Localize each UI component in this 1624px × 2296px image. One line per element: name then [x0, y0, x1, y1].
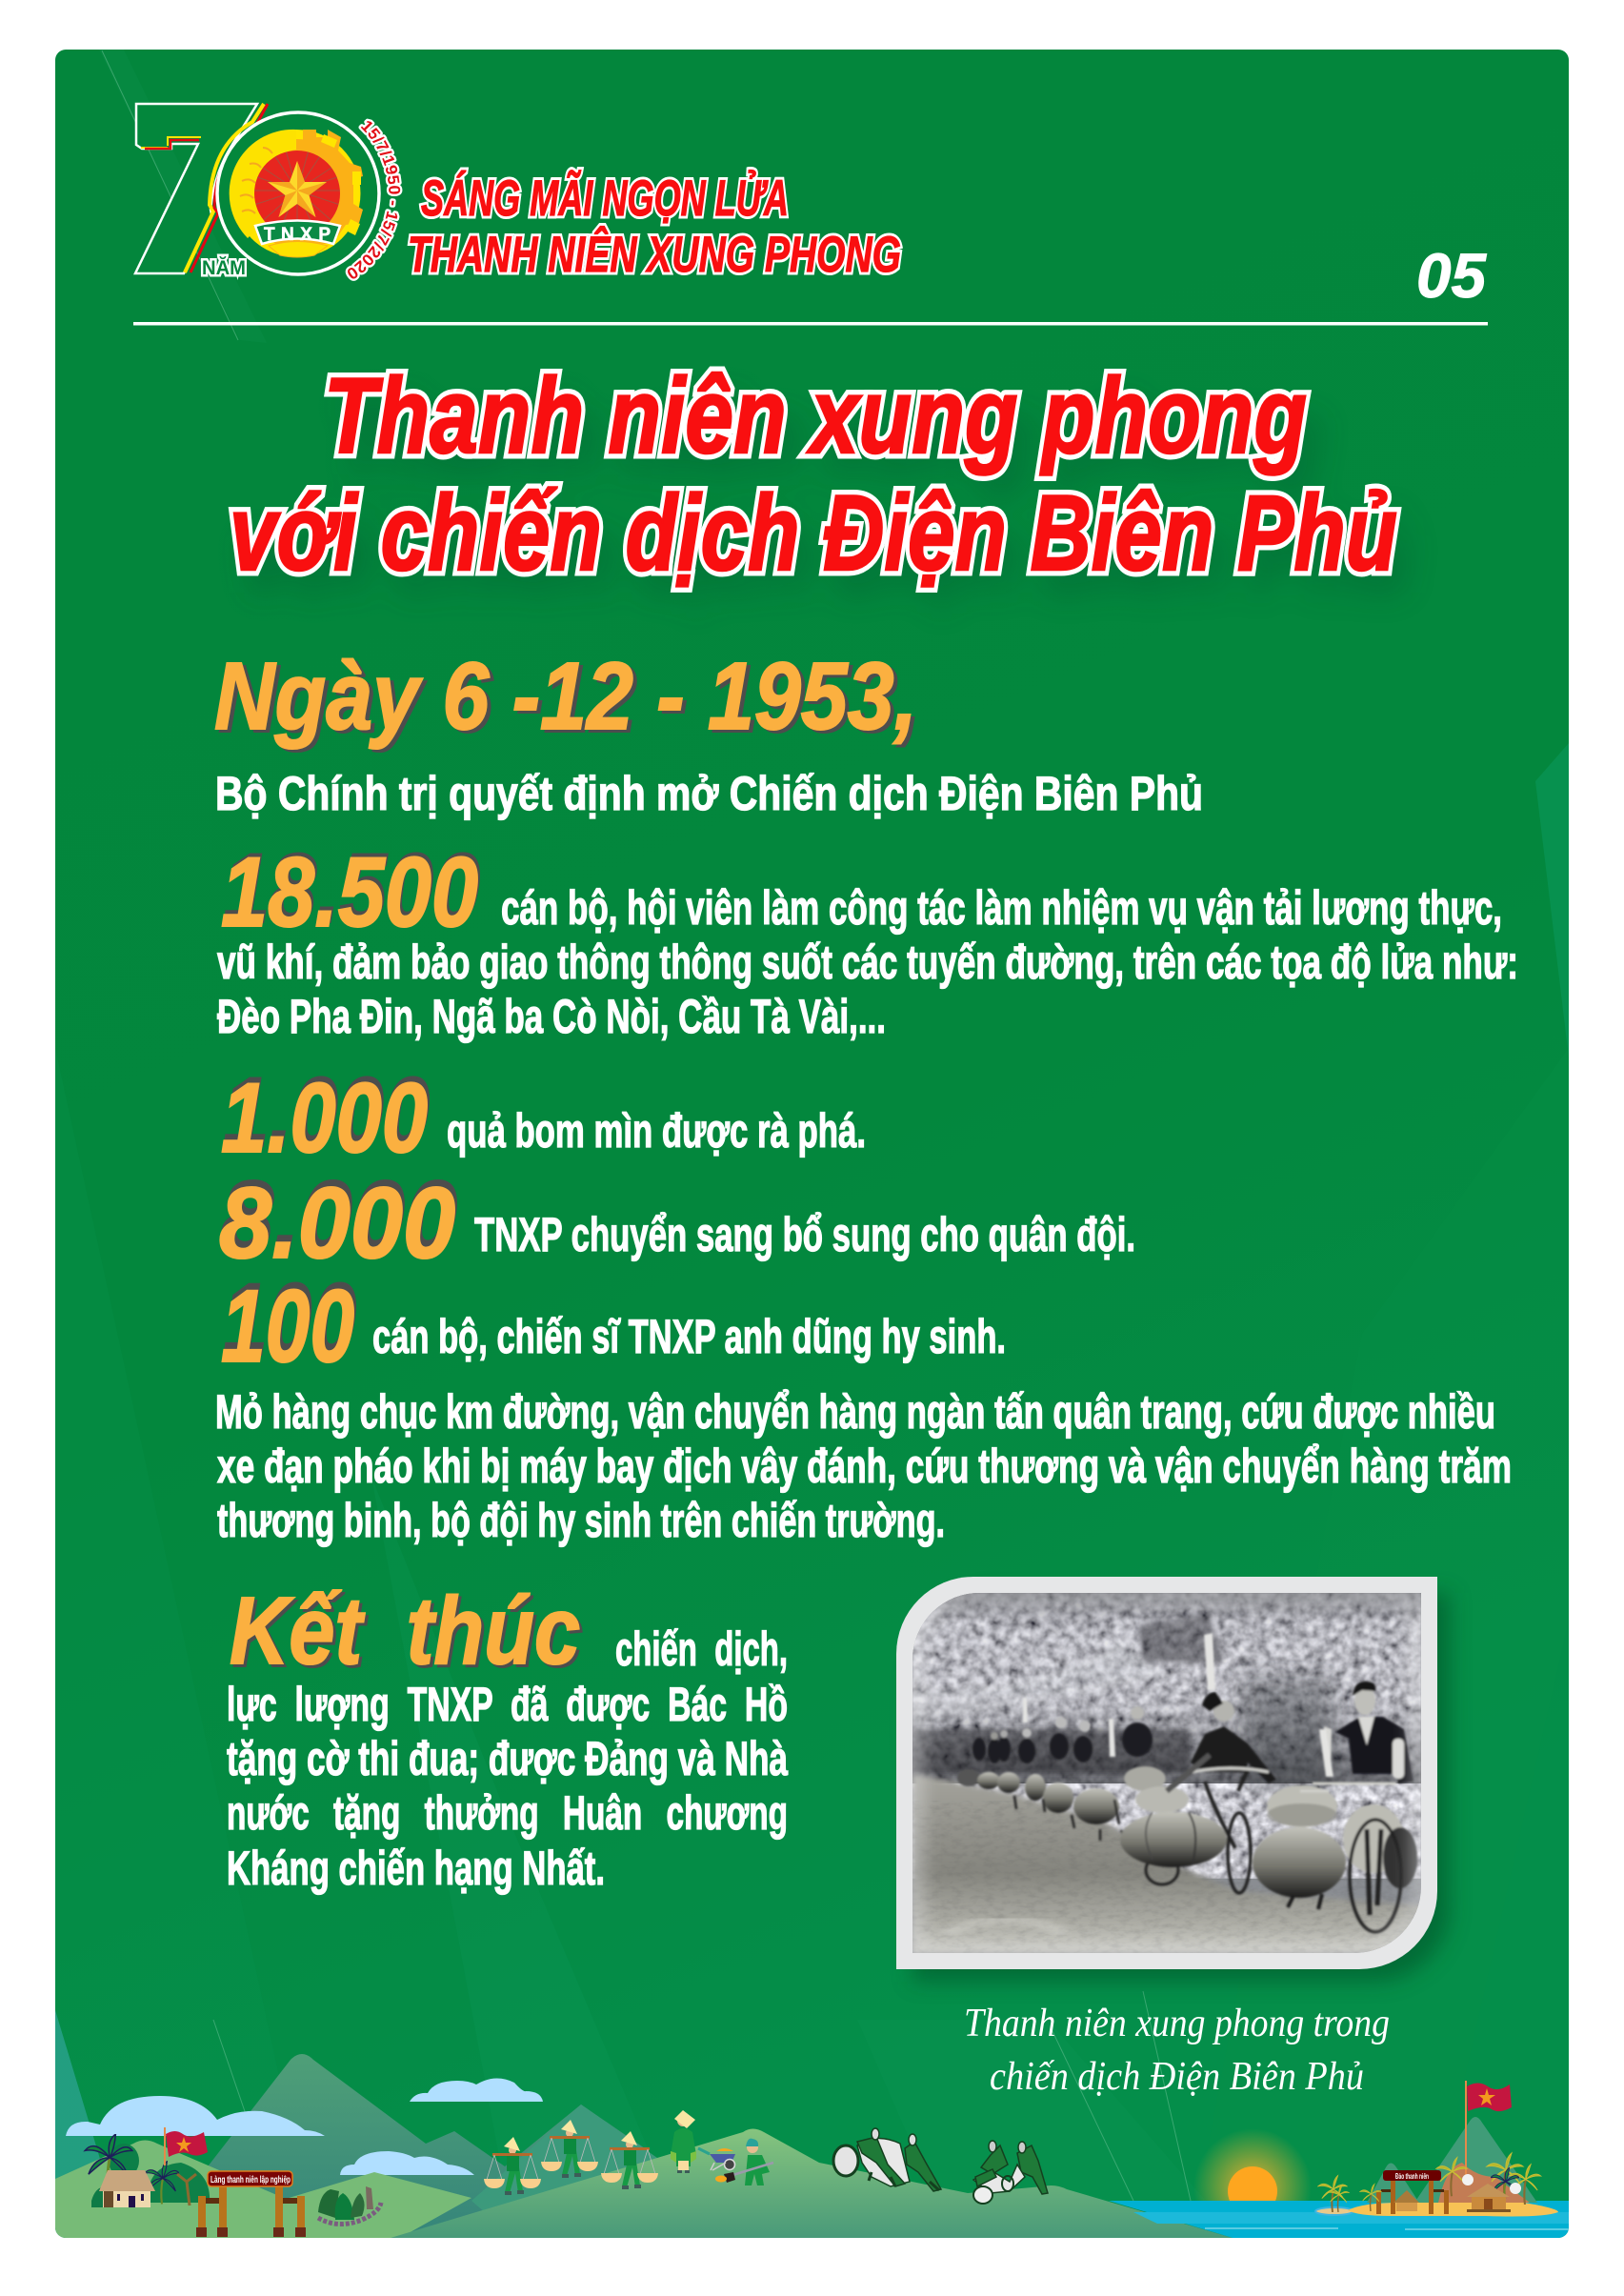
- woman in conical hat: [671, 2110, 696, 2173]
- man with bicycle, right: [1335, 1717, 1413, 1783]
- logo label NĂM: NĂM: [202, 257, 246, 279]
- statistic: 1.000: 1.000: [223, 1057, 430, 1168]
- statistic: 18.500: [217, 834, 1518, 1043]
- island gate: [1376, 2170, 1449, 2214]
- date heading: Ngày 6 -12 - 1953,: [214, 643, 917, 750]
- conclusion text block: nước tặng thưởng Huân chương: [227, 1786, 788, 1840]
- statistic: 8.000: 8.000: [219, 1167, 455, 1279]
- statistic: 8.000: [219, 1160, 1135, 1279]
- flag right: [1465, 2081, 1512, 2176]
- header slogan: THANH NIÊN XUNG PHONG: [408, 225, 901, 283]
- sea: [1109, 2201, 1569, 2238]
- soldiers group: [318, 2186, 381, 2225]
- statistic: 100: [221, 1261, 1006, 1383]
- decision text: Bộ Chính trị quyết định mở Chiến dịch Điện Biên Phủ: [215, 767, 1203, 820]
- conclusion text block: lực lượng TNXP đã được Bác Hồ: [227, 1678, 788, 1731]
- logo numeral seven: [135, 104, 268, 273]
- flag left: [164, 2127, 208, 2165]
- statistic: 100: 100: [221, 1268, 354, 1383]
- statistic: 8.000: TNXP chuyển sang bổ sung cho quân đội.: [474, 1208, 1135, 1261]
- photo frame: [896, 1577, 1451, 1982]
- workers carrying baskets: [484, 2120, 658, 2195]
- header logo: 70 years emblem: [133, 103, 402, 281]
- bicycle wheels: [1146, 1856, 1178, 1884]
- statistic: 18.500: 18.500: [221, 837, 478, 948]
- logo emblem badge: [230, 130, 363, 257]
- conclusion text block: Kết thúc: [232, 1581, 583, 1687]
- paragraph: road and transport work: [215, 1385, 1512, 1547]
- title: Thanh niên xung phong: [338, 378, 1321, 497]
- date heading: Ngày 6 -12 - 1953,: [218, 646, 921, 753]
- statistic: 8.000: 8.000: [221, 1160, 457, 1273]
- village: palm trees and stilt house: [85, 2134, 210, 2207]
- road: [912, 1774, 1421, 1953]
- page number: 05: [1416, 240, 1487, 311]
- conclusion text block: Kháng chiến hạng Nhất.: [227, 1842, 605, 1895]
- statistic: 100: cán bộ, chiến sĩ TNXP anh dũng hy sinh.: [372, 1310, 1006, 1363]
- motorbikes team 1: [833, 2128, 941, 2191]
- gate: village sign: Làng thanh niên lập nghiệp: [211, 2175, 291, 2185]
- ribbon TNXP: [255, 221, 340, 244]
- conclusion text block: Kết thúc: [230, 1578, 580, 1684]
- statistic: 100: 100: [223, 1261, 356, 1377]
- statistic: 18.500: 18.500: [223, 834, 480, 944]
- island houses: [1393, 2174, 1521, 2212]
- star: [268, 161, 327, 217]
- white poles: [1023, 1633, 1333, 1777]
- logo anniversary dates on arc: 15/7/1950 - 15/7/2020: [345, 118, 402, 281]
- riders in the distance: [972, 1738, 986, 1761]
- worker with shovel: [715, 2139, 773, 2185]
- statistic: 1.000: quả bom mìn được rà phá.: [447, 1104, 866, 1158]
- man with bicycle, middle: [1191, 1726, 1276, 1783]
- wheelbarrow: [698, 2148, 735, 2170]
- conclusion text block: [227, 1578, 788, 1895]
- sun: [1196, 2130, 1310, 2201]
- header slogan: [408, 170, 901, 283]
- gate: village sign: [196, 2171, 306, 2237]
- background mountains: [209, 2054, 657, 2231]
- photo caption: [964, 2002, 1390, 2099]
- header slogan: SÁNG MÃI NGỌN LỬA: [421, 170, 789, 227]
- statistic: 18.500: Đèo Pha Đin, Ngã ba Cò Nòi, Cầu Tà Vài,...: [217, 990, 886, 1043]
- header rule: [133, 322, 1488, 326]
- title: Thanh niên xung phong: [324, 356, 1307, 475]
- logo emblem badge: TNXP: [264, 225, 331, 245]
- front hills: [55, 2128, 1233, 2238]
- logo ring: [217, 112, 379, 274]
- statistic: 1.000: 1.000: [221, 1063, 428, 1174]
- conclusion text block: chiến dịch,: [615, 1622, 788, 1676]
- motorbikes team 2: [973, 2141, 1048, 2204]
- bottom landscape illustration: [55, 2054, 1569, 2246]
- clouds: [66, 2078, 543, 2175]
- photo caption: Thanh niên xung phong trong: [964, 2002, 1390, 2045]
- title: [230, 356, 1411, 615]
- header slogan: SÁNG MÃI NGỌN LỬA: [421, 170, 789, 227]
- island gate: Đảo thanh niên: [1395, 2172, 1429, 2181]
- photo caption: chiến dịch Điện Biên Phủ: [990, 2055, 1364, 2099]
- island palms: [1360, 2153, 1541, 2211]
- header slogan: THANH NIÊN XUNG PHONG: [408, 225, 901, 283]
- small palm islet: [1315, 2176, 1353, 2215]
- island mountains: [1367, 2117, 1537, 2203]
- title: Thanh niên xung phong: [324, 356, 1307, 475]
- conclusion text block: tặng cờ thi đua; được Đảng và Nhà: [227, 1732, 788, 1785]
- sand island: [1348, 2203, 1558, 2216]
- paragraph: road and transport work: thương binh, bộ đội hy sinh trên chiến trường.: [217, 1494, 945, 1547]
- statistic: 1.000: [221, 1057, 866, 1174]
- historic photo: bicycle convoy: [912, 1593, 1421, 1953]
- photo vignette: [912, 1593, 1421, 1953]
